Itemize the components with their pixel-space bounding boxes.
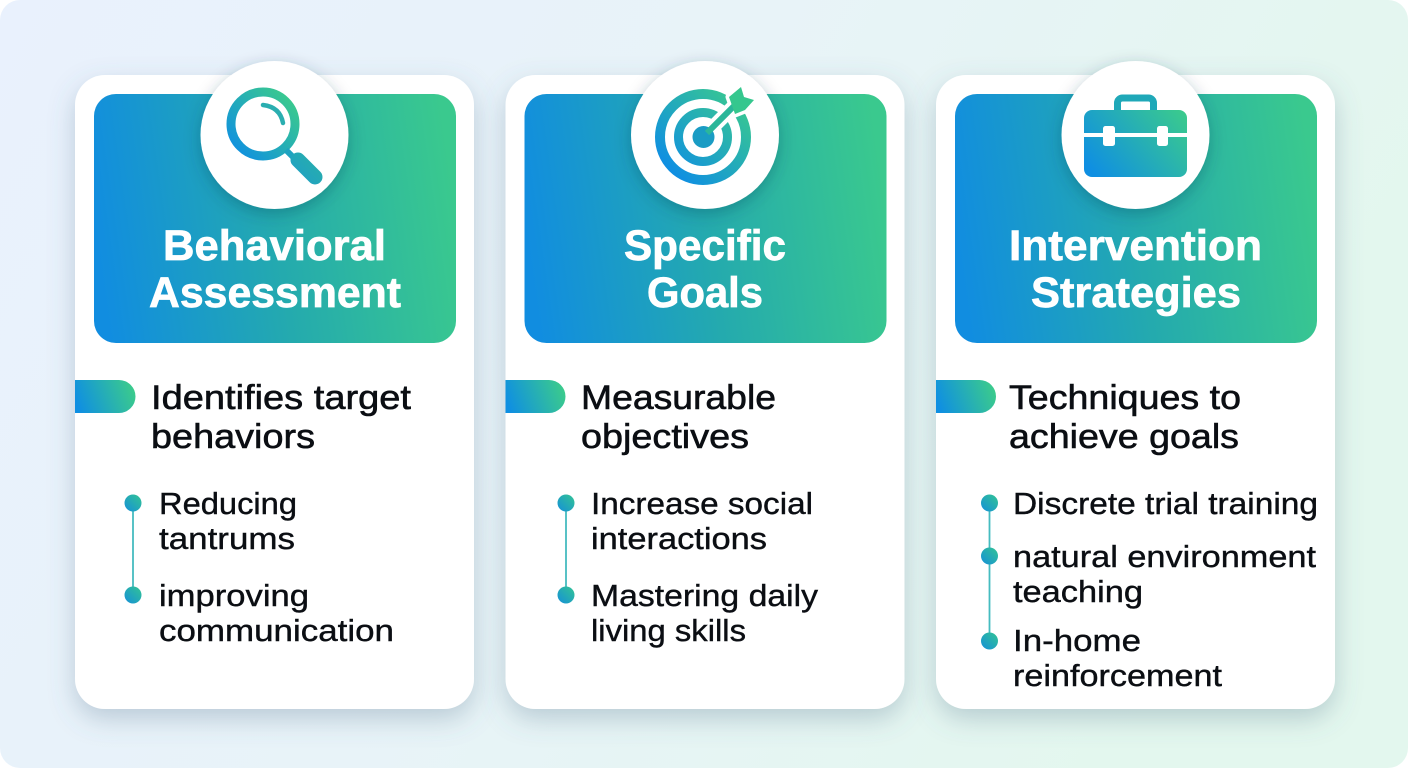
bullet timeline [981,494,998,650]
heading: Specific [624,223,786,270]
bullet: improving communication: communication [159,613,394,648]
subheading [581,379,776,456]
heading: Intervention [1009,223,1262,270]
bullet: Reducing tantrums [159,486,297,556]
heading: Strategies [1031,270,1241,317]
bullet: Increase social interactions: interactions [591,521,767,556]
header banner [524,94,886,343]
subheading: Identifies target [151,379,411,417]
header banner [94,94,456,343]
card background [506,75,904,709]
subheading: objectives [581,418,749,456]
bullet: Reducing tantrums: Reducing [159,486,297,521]
bullet: improving communication: improving [159,578,309,613]
subheading [151,379,411,456]
bullet timeline [558,494,574,604]
bullet: Mastering daily living skills: Mastering daily [591,578,819,613]
icon: briefcase [1062,61,1210,209]
bullet timeline [124,494,142,604]
card background [936,75,1335,709]
bullet: improving communication [159,578,394,648]
heading [149,223,401,317]
bullet: In-home reinforcement: reinforcement [1013,658,1222,693]
heading: Assessment [149,270,401,317]
bullet: natural environment teaching [1013,539,1316,609]
bullet: natural environment teaching: natural environment [1013,539,1316,574]
bullet: Discrete trial training: Discrete trial training [1013,486,1318,521]
bullet: Increase social interactions: Increase social [591,486,813,521]
accent pill [936,380,996,413]
bullet: Mastering daily living skills: living skills [591,613,746,648]
header banner [955,94,1317,343]
heading: Goals [647,270,763,317]
subheading: achieve goals [1009,418,1239,456]
icon: magnifying glass [200,61,348,209]
subheading [1009,379,1241,456]
icon: target with arrow [631,61,779,209]
bullet: Reducing tantrums: tantrums [159,521,295,556]
bullet: In-home reinforcement [1013,623,1222,693]
panel: Specific Goals [506,61,904,709]
subheading: behaviors [151,418,315,456]
accent pill [75,380,136,413]
card background [75,75,474,709]
subheading: Measurable [581,379,776,417]
panel: Intervention Strategies [936,61,1335,709]
heading: Behavioral [163,223,386,270]
bullet: Increase social interactions [591,486,813,556]
bullet: Mastering daily living skills [591,578,819,648]
accent pill [506,380,566,413]
bullet: In-home reinforcement: In-home [1013,623,1141,658]
panel: Behavioral Assessment [75,61,474,709]
heading [1009,223,1262,317]
heading [624,223,786,317]
bullet: natural environment teaching: teaching [1013,574,1143,609]
subheading: Techniques to [1009,379,1241,417]
